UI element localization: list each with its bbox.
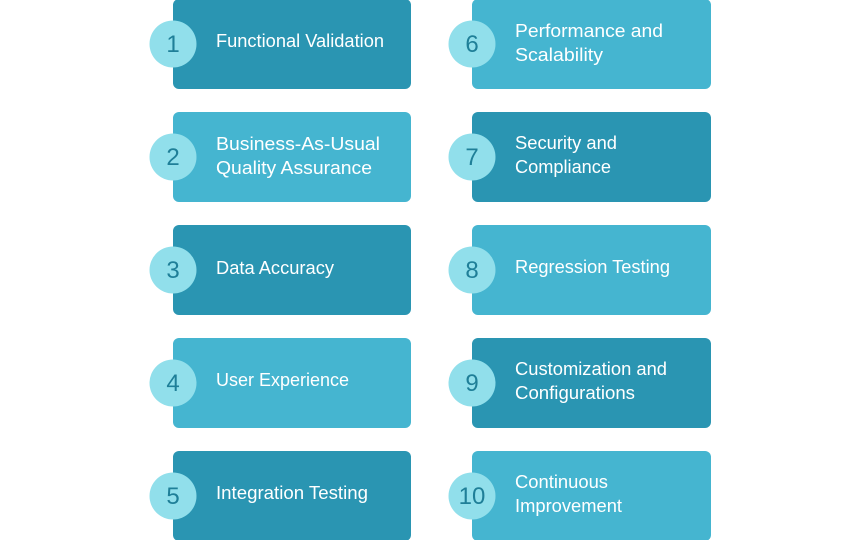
item 7: Security and Compliance: Compliance (515, 157, 611, 177)
item 10: Continuous Improvement: Continuous (515, 472, 608, 492)
item 3: Data Accuracy (150, 225, 411, 315)
item 3: Data Accuracy: Data Accuracy (216, 258, 334, 278)
item 1: Functional Validation: 1 (166, 31, 180, 58)
item 9: Customization and Configurations: 9 (465, 370, 479, 397)
item 6: Performance and Scalability: Performance and (515, 21, 663, 41)
item 5: Integration Testing: 5 (166, 483, 180, 510)
item 6: Performance and Scalability: 6 (465, 31, 479, 58)
item 5: Integration Testing (150, 451, 411, 540)
item 8: Regression Testing (448, 225, 711, 315)
item 9: Customization and Configurations: Configurations (515, 383, 635, 403)
item 5: Integration Testing: Integration Testing (216, 483, 368, 503)
item 2: Business-As-Usual Quality Assurance (150, 112, 411, 202)
item 8: Regression Testing: 8 (465, 257, 479, 284)
item 10: Continuous Improvement (448, 451, 711, 540)
item 7: Security and Compliance: 7 (465, 144, 479, 171)
item 4: User Experience: User Experience (216, 370, 349, 390)
item 7: Security and Compliance: Security and (515, 133, 617, 153)
item 1: Functional Validation (150, 0, 411, 89)
item 4: User Experience: 4 (166, 370, 180, 397)
item 10: Continuous Improvement: 10 (459, 483, 485, 510)
item 4: User Experience (150, 338, 411, 428)
item 8: Regression Testing: Regression Testing (515, 257, 670, 277)
item 9: Customization and Configurations (448, 338, 711, 428)
item 2: Business-As-Usual Quality Assurance: 2 (166, 144, 180, 171)
item 6: Performance and Scalability: Scalability (515, 45, 603, 65)
item 2: Business-As-Usual Quality Assurance: Quality Assurance (216, 158, 372, 178)
item 6: Performance and Scalability (448, 0, 711, 89)
item 2: Business-As-Usual Quality Assurance: Business-As-Usual (216, 134, 380, 154)
item 3: Data Accuracy: 3 (166, 257, 180, 284)
item 9: Customization and Configurations: Customization and (515, 359, 667, 379)
item 10: Continuous Improvement: Improvement (515, 496, 622, 516)
item 7: Security and Compliance (448, 112, 711, 202)
item 1: Functional Validation: Functional Validation (216, 31, 384, 51)
